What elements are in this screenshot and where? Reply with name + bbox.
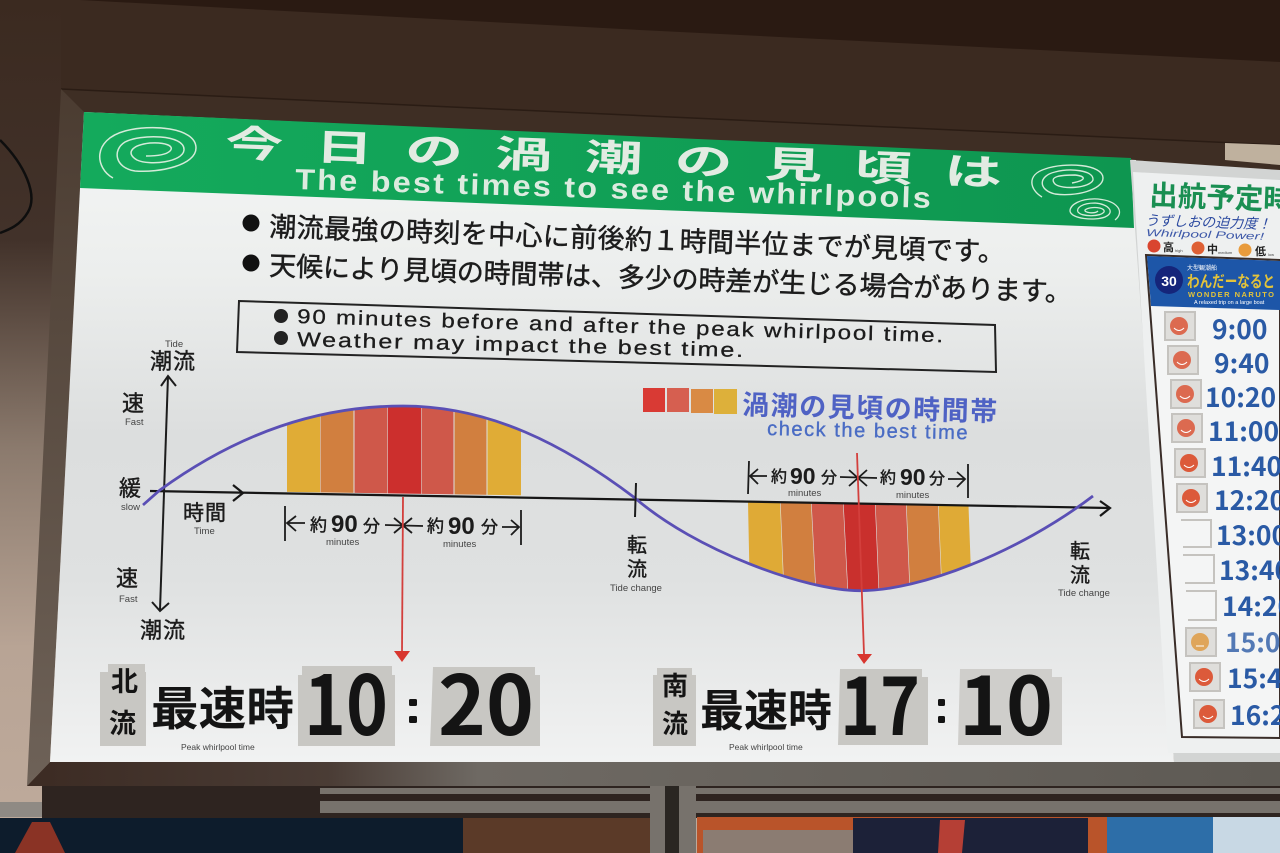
peak window bars: north flow <box>287 407 521 496</box>
tide change label right: 流 <box>1070 564 1090 587</box>
axis labels <box>116 339 227 643</box>
English notes box: Weather may impact the best time. <box>297 329 745 362</box>
tide change label right <box>1058 540 1110 599</box>
north peak time <box>298 640 540 759</box>
90 minutes span: north: 分 <box>363 517 380 536</box>
south peak time: 10 <box>959 643 1053 759</box>
axis labels: Time <box>194 526 215 537</box>
subtitle: The best times to see the whirlpools <box>295 164 933 215</box>
peak label south: Peak whirlpool time <box>729 742 803 752</box>
banner: Wonder Naruto: WONDER NARUTO <box>1188 290 1274 299</box>
axis labels: Fast <box>119 594 138 605</box>
panel: departure schedule <box>1130 160 1280 762</box>
row: 15:00 <box>1186 621 1280 660</box>
row: 15:40 <box>1190 657 1280 696</box>
north flow flip card: 流 <box>109 709 136 739</box>
north peak time: 10 <box>304 640 388 759</box>
tide axis <box>152 376 176 611</box>
legend: best time colour key <box>643 388 998 444</box>
90 minutes span: south: 分 <box>821 469 837 487</box>
axis labels: 潮流 <box>150 349 196 374</box>
90 minutes span: south: minutes <box>788 488 822 499</box>
row: 10:20 <box>1171 376 1276 415</box>
green header band <box>80 112 1134 228</box>
90 minutes span: north: 分 <box>481 518 498 537</box>
cable <box>0 140 31 233</box>
peak label north: Peak whirlpool time <box>181 742 255 752</box>
90 minutes span: south: 90 <box>790 463 816 489</box>
90 minutes span: north <box>285 506 521 550</box>
power legend: high <box>1175 248 1183 253</box>
90 minutes span: north: 90 <box>448 513 475 540</box>
peak window bars: south flow <box>748 502 971 590</box>
90 minutes span: south: 約 <box>880 469 896 487</box>
peak label north: 最速時 <box>151 683 294 735</box>
row: 9:00: 9:00 <box>1212 308 1268 347</box>
banner: Wonder Naruto: A relaxed trip on a large boat <box>1194 300 1265 306</box>
tide change label right: 転 <box>1070 540 1090 563</box>
tide change label center: 流 <box>627 558 647 581</box>
power legend: 中 <box>1207 242 1218 256</box>
90 minutes span: north: 約 <box>427 517 444 536</box>
90 minutes span: south: 90 <box>900 464 926 490</box>
English notes box: 90 minutes before and after the peak whirlpool time. <box>297 306 945 347</box>
axis labels: 時間 <box>183 502 227 525</box>
axis labels: 速 <box>122 391 144 416</box>
Japanese notes <box>242 212 1072 308</box>
south peak time <box>838 643 1062 759</box>
tide change label center <box>610 534 662 594</box>
title: 今日の渦潮の見頃は <box>225 123 1035 195</box>
row: 10:20: 10:20 <box>1205 376 1276 415</box>
Japanese notes: 潮流最強の時刻を中心に前後約１時間半位までが見頃です。 <box>269 212 1005 268</box>
south peak time: 17 <box>840 643 920 758</box>
row: 11:00 <box>1172 410 1279 449</box>
whirlpool power label: Whirlpool Power! <box>1146 228 1265 243</box>
north peak time: 20 <box>438 640 534 759</box>
legend: best time colour key: 渦潮の見頃の時間帯 <box>742 390 998 427</box>
90 minutes span: north: 約 <box>310 516 327 535</box>
power legend <box>1148 240 1274 258</box>
row: 16:20 <box>1194 694 1280 733</box>
tide curve <box>143 406 1093 591</box>
north flow flip card <box>100 664 146 746</box>
power legend: 高 <box>1163 240 1174 254</box>
row: 9:40 <box>1168 342 1270 381</box>
axis labels: Tide <box>165 339 183 350</box>
tide change label right: Tide change <box>1058 588 1110 599</box>
schedule table border <box>1146 255 1280 738</box>
legend: best time colour key: check the best time <box>767 418 969 444</box>
90 minutes span: north: minutes <box>443 539 477 550</box>
whirlpool power label: うずしおの迫力度！ <box>1145 212 1271 232</box>
banner: Wonder Naruto <box>1147 256 1280 310</box>
axis labels: 潮流 <box>140 618 186 643</box>
tide change tick <box>635 483 636 517</box>
banner: Wonder Naruto: 30 <box>1161 273 1177 289</box>
whirlpool power label <box>1145 212 1271 243</box>
axis labels: Fast <box>125 417 144 428</box>
row: 14:20 <box>1186 585 1280 624</box>
icon: whirlpool right upper <box>1032 165 1103 197</box>
peak label south: 最速時 <box>700 687 832 736</box>
row: 13:00 <box>1181 514 1280 553</box>
tide change label center: 転 <box>627 534 647 557</box>
south flow flip card: 南 <box>662 671 688 701</box>
90 minutes span: south <box>748 461 968 501</box>
banner: Wonder Naruto: 大型観潮船 <box>1187 264 1217 272</box>
icon: whirlpool left <box>100 128 196 178</box>
90 minutes span: south: minutes <box>896 490 930 501</box>
power legend: medium <box>1218 250 1233 255</box>
sign frame <box>27 89 1280 786</box>
Japanese notes: 天候により見頃の時間帯は、多少の時差が生じる場合があります。 <box>269 251 1072 308</box>
axis labels: slow <box>121 502 140 513</box>
row: 9:40: 9:40 <box>1214 342 1270 381</box>
axis labels: 速 <box>116 566 138 591</box>
row: 11:40 <box>1175 445 1280 484</box>
main lit panel <box>50 112 1174 762</box>
red arrow: north peak <box>394 497 410 662</box>
90 minutes span: north: 90 <box>331 511 358 538</box>
axis labels: 緩 <box>119 476 141 501</box>
90 minutes span: south: 約 <box>771 468 787 486</box>
row: 13:40 <box>1183 549 1280 588</box>
row: 12:20 <box>1177 479 1280 518</box>
90 minutes span: north: minutes <box>326 537 360 548</box>
90 minutes span: south: 分 <box>929 470 945 488</box>
tide change label center: Tide change <box>610 583 662 594</box>
row: 11:00: 11:00 <box>1208 410 1279 449</box>
red arrow: south peak <box>857 453 872 664</box>
English notes box <box>237 301 996 372</box>
north flow flip card: 北 <box>111 667 138 697</box>
south flow flip card: 流 <box>662 709 688 739</box>
lower fixtures <box>0 786 1280 853</box>
south flow flip card <box>653 668 696 746</box>
power legend: 低 <box>1255 244 1266 258</box>
power legend: low <box>1268 252 1274 257</box>
row: 9:00 <box>1165 308 1268 347</box>
time axis <box>150 485 1110 516</box>
icon: whirlpool right lower <box>1070 199 1120 220</box>
